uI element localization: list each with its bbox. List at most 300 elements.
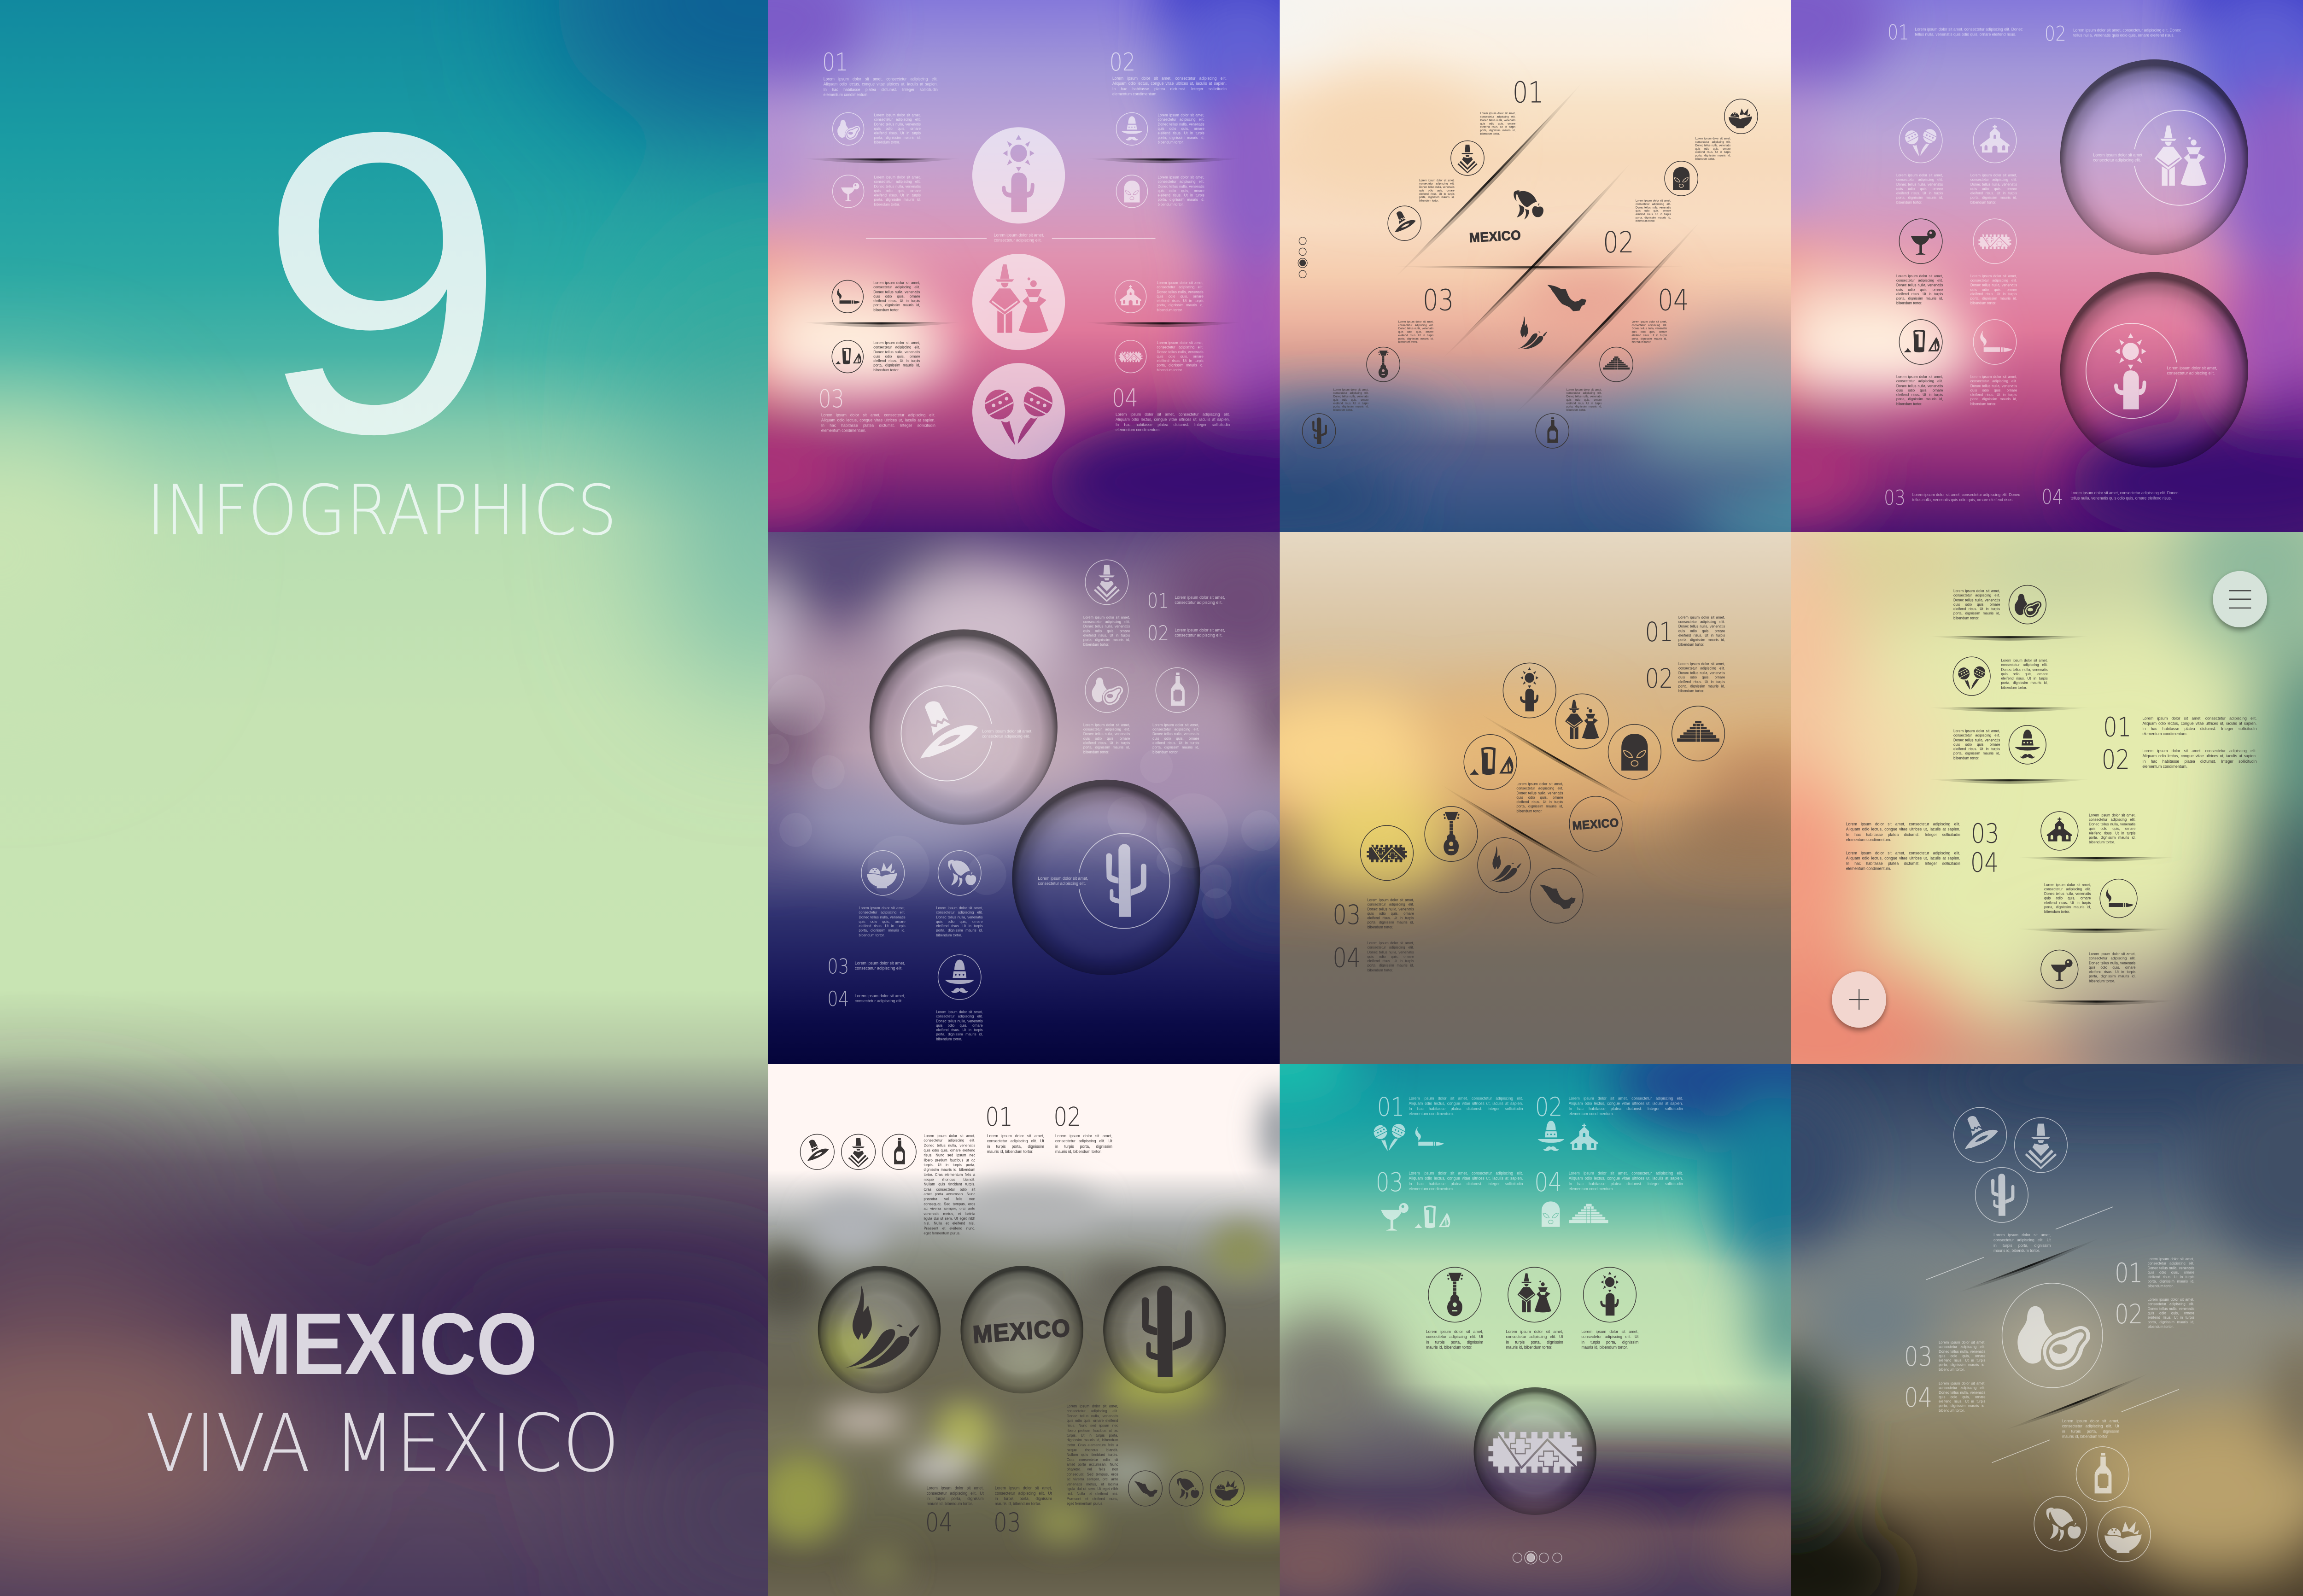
caption: cigar: consectetur adipiscing elit. xyxy=(1970,380,2017,384)
text block 01: Lorem ipsum dolor sit amet, consectetur adipiscing elit. xyxy=(824,76,938,82)
text 01: tellus nulla, venenatis quis odio quis, ornare eleifend risus. xyxy=(1915,32,2016,37)
text 01: Aliquam odio lectus, congue vitae ultrices ut, iaculis at sapien. xyxy=(2142,721,2256,726)
text block 02: Lorem ipsum dolor sit amet, consectetur adipiscing elit. xyxy=(1112,76,1227,81)
caption: tequila shot: quis odio quis, ornare xyxy=(873,355,920,359)
caption: church: quis odio quis, ornare xyxy=(2089,827,2135,831)
text 04: bibendum tortor. xyxy=(1367,968,1393,972)
caption: church: consectetur adipiscing elit. xyxy=(1157,286,1204,290)
caption 4: bibendum tortor. xyxy=(1636,219,1655,222)
text 03: in turpis porta, dignissim xyxy=(995,1496,1052,1501)
caption: taco xyxy=(936,906,983,938)
caption 2: quis odio quis, ornare xyxy=(1419,189,1455,192)
caption: avocado: Donec tellus nulla, venenatis xyxy=(874,123,921,126)
caption: maracas: bibendum tortor. xyxy=(1896,200,1922,205)
title: big number 9: 9 xyxy=(257,43,507,522)
text 01: Lorem ipsum dolor sit amet, xyxy=(2148,1257,2194,1261)
text 03: Lorem ipsum dolor sit amet, xyxy=(995,1486,1052,1491)
text 02: Donec tellus nulla, venenatis xyxy=(2148,1307,2194,1311)
text 01: Lorem ipsum dolor sit amet, consectetur adipiscing elit. xyxy=(2142,716,2256,721)
caption: cigar: consectetur adipiscing elit. xyxy=(2044,887,2091,891)
caption 6: quis odio quis, ornare xyxy=(1333,398,1368,401)
caption: church: porta, dignissim mauris id, xyxy=(1970,196,2017,200)
caption: sombrero: Lorem ipsum dolor sit amet, xyxy=(936,1010,983,1014)
icon: maracas xyxy=(1953,657,1990,696)
text 02 xyxy=(1175,628,1225,638)
caption: tequila shot: quis odio quis, ornare xyxy=(1896,388,1943,392)
caption: tequila shot: bibendum tortor. xyxy=(1896,402,1922,406)
button: menu xyxy=(2213,571,2267,627)
text 01: bibendum tortor. xyxy=(2148,1284,2174,1288)
caption upper: consectetur adipiscing elit. Ut xyxy=(1993,1238,2051,1243)
icon: woven pattern xyxy=(1115,340,1146,373)
caption: cigar xyxy=(873,281,920,312)
long text column, bottom: consectetur adipiscing elit. xyxy=(1067,1409,1118,1413)
panel: infographic 5, sunset with icon circles xyxy=(1280,532,1792,1064)
caption: margarita: Lorem ipsum dolor sit amet, xyxy=(874,175,921,180)
caption: margarita: Donec tellus nulla, venenatis xyxy=(874,184,921,188)
caption: cigar: Donec tellus nulla, venenatis xyxy=(1970,384,2017,388)
long text column, bottom: Praesent et eleifend nunc, xyxy=(1067,1497,1118,1501)
caption: cigar: eleifend risus. Ut in turpis xyxy=(2044,901,2091,905)
caption: margarita: consectetur adipiscing elit. xyxy=(2089,957,2135,961)
text 02: mauris id, bibendum tortor. xyxy=(1055,1149,1102,1154)
caption: cigar: Lorem ipsum dolor sit amet, xyxy=(2044,883,2091,887)
number 01: 01 xyxy=(1888,21,1909,44)
text 01: porta, dignissim mauris id, xyxy=(2148,1280,2194,1284)
text 03: porta, dignissim mauris id, xyxy=(1939,1363,1985,1367)
icon: couple in open ring xyxy=(2134,110,2225,205)
text block 02: Aliquam odio lectus, congue vitae ultrices ut, iaculis at sapien. xyxy=(1112,81,1227,86)
center text xyxy=(1516,782,1563,813)
caption: church xyxy=(1157,281,1204,312)
icon: avocado large xyxy=(2002,1283,2103,1388)
caption 3 xyxy=(1695,137,1730,160)
caption: church xyxy=(2089,813,2135,845)
text 02: Lorem ipsum dolor sit amet, xyxy=(1175,628,1225,632)
number 01: 01 xyxy=(1377,1092,1404,1122)
caption: church: consectetur adipiscing elit. xyxy=(1970,178,2017,182)
caption 8: consectetur adipiscing elit. xyxy=(1567,391,1602,395)
caption: tequila shot xyxy=(1896,375,1943,407)
long text column, bottom: quis odio quis, ornare eleifend xyxy=(1067,1419,1118,1423)
caption: cigar: eleifend risus. Ut in turpis xyxy=(1970,393,2017,397)
caption 5: quis odio quis, ornare xyxy=(1398,330,1433,333)
caption: cactus and sun: in turpis porta, dignissim xyxy=(1581,1340,1638,1345)
text 01 xyxy=(1915,27,2022,37)
icon: cigar xyxy=(1973,320,2017,364)
text block 01: Aliquam odio lectus, congue vitae ultrices ut, iaculis at sapien. xyxy=(824,82,938,87)
text block 04: Lorem ipsum dolor sit amet, consectetur adipiscing elit. xyxy=(1116,412,1230,417)
text 04: porta, dignissim mauris id, xyxy=(1367,964,1414,968)
long text column, top: consequat. Sed tempus, eros xyxy=(924,1202,975,1206)
caption: wrestler mask: Donec tellus nulla, venenatis xyxy=(1157,184,1204,188)
caption: maracas xyxy=(1896,173,1943,205)
icon: cigar xyxy=(1415,1127,1444,1146)
text 03: mauris id, bibendum tortor. xyxy=(995,1502,1041,1506)
icon: pyramid xyxy=(1569,1204,1608,1223)
caption: tequila shot: bibendum tortor. xyxy=(873,368,900,372)
caption: sombrero: quis odio quis, ornare xyxy=(1157,127,1204,131)
caption: margarita: quis odio quis, ornare xyxy=(1896,288,1943,292)
button: add xyxy=(1832,971,1886,1028)
text 02 xyxy=(2148,1298,2194,1329)
caption: avocado xyxy=(874,113,921,145)
caption 8: bibendum tortor. xyxy=(1567,408,1586,412)
number 03: 03 xyxy=(1884,486,1906,510)
text 03: consectetur adipiscing elit. xyxy=(1367,903,1414,906)
text 03: In hac habitasse platea dictumst. Integer sollicitudin xyxy=(1409,1181,1523,1186)
text 01 xyxy=(987,1134,1044,1154)
cover titles xyxy=(0,0,768,1596)
caption 5: porta, dignissim mauris id, xyxy=(1398,337,1433,340)
caption: woven pattern: porta, dignissim mauris id, xyxy=(1970,297,2017,301)
caption: avocado xyxy=(1953,589,2000,620)
caption: woven pattern: eleifend risus. Ut in turpis xyxy=(1970,292,2017,296)
text 01: Donec tellus nulla, venenatis xyxy=(1678,625,1725,629)
text 02: porta, dignissim mauris id, xyxy=(2148,1320,2194,1324)
caption 4 xyxy=(1636,199,1671,222)
long text column, top: neque rhoncus blandit. xyxy=(924,1178,975,1182)
text 01: Lorem ipsum dolor sit amet, consectetur adipiscing elit. Donec xyxy=(1915,27,2022,32)
caption: bottle: bibendum tortor. xyxy=(1152,750,1178,754)
caption: cactus and sun xyxy=(1581,1329,1638,1350)
caption: cigar xyxy=(1970,375,2017,407)
caption: sombrero: consectetur adipiscing elit. xyxy=(1157,118,1204,122)
caption: woven pattern: bibendum tortor. xyxy=(1970,301,1996,305)
background xyxy=(1280,0,1792,532)
caption: maracas: Donec tellus nulla, venenatis xyxy=(2001,667,2048,672)
number 02: 02 xyxy=(2045,22,2066,46)
lens: cactus xyxy=(1012,780,1200,975)
caption: nacho bowl: Donec tellus nulla, venenatis xyxy=(859,915,906,919)
caption: maracas: Donec tellus nulla, venenatis xyxy=(1896,182,1943,187)
text 03: consectetur adipiscing elit. xyxy=(1939,1345,1985,1349)
caption 3: Lorem ipsum dolor sit amet, xyxy=(1695,137,1730,140)
caption 6 xyxy=(1333,388,1368,412)
long text column, top: Praesent et eleifend nunc, xyxy=(924,1226,975,1230)
number 04: 04 xyxy=(1333,943,1361,973)
text 04: In hac habitasse platea dictumst. Integer sollicitudin xyxy=(1569,1181,1683,1186)
icon: MEXICO wordmark in ring: MEXICO xyxy=(1572,816,1619,833)
number 03: 03 xyxy=(1333,900,1361,930)
text 02: quis odio quis, ornare xyxy=(1678,676,1725,679)
text 03 xyxy=(1939,1340,1985,1372)
caption: sombrero xyxy=(1157,113,1204,145)
icon: guitar xyxy=(1428,1267,1481,1322)
caption: couple xyxy=(1506,1329,1563,1350)
lens: cactus xyxy=(1103,1266,1226,1393)
text 01: Aliquam odio lectus, congue vitae ultrices ut, iaculis at sapien. xyxy=(1409,1101,1523,1106)
caption: avocado: quis odio quis, ornare xyxy=(1953,602,2000,607)
icon: chili peppers xyxy=(1517,316,1547,349)
long text column, bottom: libero pretium faucibus ut ac xyxy=(1067,1429,1118,1432)
text 01: in turpis porta, dignissim xyxy=(987,1144,1044,1149)
caption: sombrero: porta, dignissim mauris id, xyxy=(1157,136,1204,140)
caption: maracas: Lorem ipsum dolor sit amet, xyxy=(2001,659,2048,663)
caption 8: porta, dignissim mauris id, xyxy=(1567,405,1602,408)
icon: sombrero xyxy=(1116,113,1148,145)
text 01: consectetur adipiscing elit. Ut xyxy=(987,1139,1044,1144)
text 03 xyxy=(995,1486,1052,1507)
caption: tequila shot: consectetur adipiscing elit. xyxy=(1896,380,1943,384)
panel: infographic 7, blurred landscape with three lenses xyxy=(768,1064,1280,1596)
text 03 xyxy=(855,961,905,971)
long text column, bottom: nisl. Nulla et eleifend nisi. xyxy=(1067,1492,1118,1496)
caption: poncho: bibendum tortor. xyxy=(1083,643,1109,647)
caption: tequila shot: Donec tellus nulla, venenatis xyxy=(873,350,920,354)
panel: cover with title xyxy=(0,0,768,1596)
text block 01: In hac habitasse platea dictumst. Integer sollicitudin xyxy=(824,87,938,92)
graphics layer xyxy=(1791,532,2303,1064)
caption upper: in turpis porta, dignissim xyxy=(1993,1243,2051,1248)
icon: tilted hat xyxy=(800,1134,834,1169)
long text column, top: Nullam quis tincidunt turpis. xyxy=(924,1182,975,1187)
pagination dots xyxy=(1298,237,1307,278)
central circles with cut-out icons: cactus, couple, maracas xyxy=(972,127,1065,459)
caption: avocado: Lorem ipsum dolor sit amet, xyxy=(1083,723,1130,727)
text 04: elementum condimentum. xyxy=(1846,866,1891,871)
center text: quis odio quis, ornare xyxy=(1516,795,1563,800)
icon: margarita xyxy=(1899,219,1942,263)
icon: taco xyxy=(938,851,981,895)
icon: wrestler mask xyxy=(1116,175,1148,208)
text 01 xyxy=(2148,1257,2194,1289)
number 02: 02 xyxy=(1147,621,1169,645)
caption: margarita: consectetur adipiscing elit. xyxy=(874,180,921,184)
caption: avocado: consectetur adipiscing elit. xyxy=(1953,594,2000,597)
icon: map of Mexico xyxy=(1530,868,1583,923)
text 02: consectetur adipiscing elit. xyxy=(1175,633,1222,637)
icon: tequila shot xyxy=(1899,320,1942,364)
text 04: tellus nulla, venenatis quis odio quis, ornare eleifend risus. xyxy=(2070,496,2172,501)
text block 02: elementum condimentum. xyxy=(1112,92,1157,96)
text 03: consectetur adipiscing elit. xyxy=(855,966,903,971)
caption 7: consectetur adipiscing elit. xyxy=(1631,323,1667,327)
text 04: Lorem ipsum dolor sit amet, xyxy=(927,1486,984,1491)
caption: margarita: Lorem ipsum dolor sit amet, xyxy=(1896,274,1943,278)
caption: woven pattern: quis odio quis, ornare xyxy=(1970,288,2017,292)
text 03: Aliquam odio lectus, congue vitae ultrices ut, iaculis at sapien. xyxy=(1409,1176,1523,1181)
center caption: consectetur adipiscing elit. xyxy=(994,238,1042,243)
text 03: consectetur adipiscing elit. Ut xyxy=(995,1491,1052,1496)
text 02: Lorem ipsum dolor sit amet, xyxy=(1678,662,1725,666)
text 04: quis odio quis, ornare xyxy=(1367,955,1414,959)
icon: avocado xyxy=(1085,668,1128,713)
caption: avocado: eleifend risus. Ut in turpis xyxy=(1083,741,1130,745)
text 01: eleifend risus. Ut in turpis xyxy=(1678,633,1725,637)
text 01: Lorem ipsum dolor sit amet, consectetur adipiscing elit. xyxy=(1409,1096,1523,1101)
caption: sombrero: consectetur adipiscing elit. xyxy=(1953,734,2000,738)
caption: tequila shot: porta, dignissim mauris id, xyxy=(1896,398,1943,402)
caption: maracas: porta, dignissim mauris id, xyxy=(2001,681,2048,685)
caption 8: Donec tellus nulla, venenatis xyxy=(1567,395,1602,398)
long text column, bottom: amet porta accumsan. Nunc xyxy=(1067,1463,1118,1467)
text 02: eleifend risus. Ut in turpis xyxy=(2148,1316,2194,1320)
caption 6: porta, dignissim mauris id, xyxy=(1333,405,1368,408)
caption: cactus and sun: consectetur adipiscing elit. Ut xyxy=(1581,1334,1638,1339)
icon: poncho xyxy=(2015,1117,2067,1173)
long text column, top: quis odio quis, ornare eleifend xyxy=(924,1148,975,1152)
caption: margarita: consectetur adipiscing elit. xyxy=(1896,279,1943,283)
caption: maracas: Lorem ipsum dolor sit amet, xyxy=(1896,173,1943,177)
text 03: tellus nulla, venenatis quis odio quis, ornare eleifend risus. xyxy=(1912,497,2014,502)
caption: cigar: quis odio quis, ornare xyxy=(873,294,920,298)
number 03: 03 xyxy=(1376,1167,1403,1197)
icon: hat in open ring xyxy=(901,686,992,781)
center text: bibendum tortor. xyxy=(1516,809,1543,813)
caption: cigar: bibendum tortor. xyxy=(873,308,900,312)
lens: chili peppers xyxy=(818,1266,941,1393)
caption: sombrero xyxy=(936,1010,983,1041)
caption: margarita xyxy=(2089,952,2135,983)
caption 1: Lorem ipsum dolor sit amet, xyxy=(1480,111,1515,115)
text 04: Lorem ipsum dolor sit amet, xyxy=(855,994,905,998)
caption: margarita: porta, dignissim mauris id, xyxy=(874,198,921,202)
text 04: Donec tellus nulla, venenatis xyxy=(1939,1391,1985,1395)
caption: nacho bowl: consectetur adipiscing elit. xyxy=(859,911,906,915)
graphics layer xyxy=(768,532,1280,1064)
caption: avocado: porta, dignissim mauris id, xyxy=(1953,612,2000,616)
text 01: Lorem ipsum dolor sit amet, xyxy=(1678,615,1725,620)
text 03 xyxy=(1409,1171,1523,1192)
text 03: Lorem ipsum dolor sit amet, consectetur adipiscing elit. Donec xyxy=(1912,492,2020,497)
text 03: Lorem ipsum dolor sit amet, xyxy=(1939,1340,1985,1345)
text 04: Lorem ipsum dolor sit amet, xyxy=(1367,941,1414,945)
lens: couple xyxy=(2060,59,2248,255)
caption 5 xyxy=(1398,320,1433,344)
text 02: tellus nulla, venenatis quis odio quis, ornare eleifend risus. xyxy=(2073,33,2174,38)
caption: woven pattern: porta, dignissim mauris id, xyxy=(1157,363,1204,368)
long text column, top: Donec tellus nulla, venenatis xyxy=(924,1144,975,1148)
caption: sombrero: eleifend risus. Ut in turpis xyxy=(936,1028,983,1032)
lens caption: cactus: consectetur adipiscing elit. xyxy=(1038,881,1086,886)
lens caption: hat xyxy=(982,729,1033,739)
caption: wrestler mask: eleifend risus. Ut in turpis xyxy=(1157,193,1204,198)
caption lower: consectetur adipiscing elit. Ut xyxy=(2062,1424,2119,1428)
caption: wrestler mask: porta, dignissim mauris id, xyxy=(1157,198,1204,202)
icon: church xyxy=(1973,118,2017,163)
caption: tequila shot: consectetur adipiscing elit. xyxy=(873,345,920,350)
caption: sombrero: Donec tellus nulla, venenatis xyxy=(1953,738,2000,742)
text 03: quis odio quis, ornare xyxy=(1367,912,1414,916)
caption 7 xyxy=(1631,320,1667,344)
cover background gradient xyxy=(0,0,768,1596)
icon: chili peppers xyxy=(1478,838,1531,893)
caption: avocado: bibendum tortor. xyxy=(1953,616,1979,620)
caption: sombrero: consectetur adipiscing elit. xyxy=(936,1015,983,1019)
caption: margarita: eleifend risus. Ut in turpis xyxy=(2089,970,2135,974)
number 01: 01 xyxy=(2115,1258,2143,1289)
caption: margarita: eleifend risus. Ut in turpis xyxy=(1896,292,1943,296)
background xyxy=(1280,1064,1792,1596)
caption: poncho: eleifend risus. Ut in turpis xyxy=(1083,633,1130,637)
text 04: bibendum tortor. xyxy=(1939,1409,1964,1413)
long text column, bottom xyxy=(1067,1404,1118,1506)
caption: nacho bowl xyxy=(859,906,906,938)
caption: church: bibendum tortor. xyxy=(1970,200,1996,205)
long text column, bottom: neque rhoncus blandit. xyxy=(1067,1448,1118,1452)
long text column, top: libero pretium faucibus ut ac xyxy=(924,1158,975,1162)
caption: margarita: bibendum tortor. xyxy=(1896,301,1922,305)
number 02: 02 xyxy=(1110,48,1135,76)
caption: nacho bowl: Lorem ipsum dolor sit amet, xyxy=(859,906,906,910)
caption 6: bibendum tortor. xyxy=(1333,408,1353,412)
caption: margarita: Donec tellus nulla, venenatis xyxy=(1896,283,1943,287)
text 03: Lorem ipsum dolor sit amet, xyxy=(855,961,905,965)
caption 1: consectetur adipiscing elit. xyxy=(1480,115,1515,118)
caption: taco: Donec tellus nulla, venenatis xyxy=(936,915,983,919)
caption: maracas: bibendum tortor. xyxy=(2001,686,2027,690)
lens: hat xyxy=(870,629,1058,825)
text 02 xyxy=(2073,28,2181,38)
caption: church xyxy=(1970,173,2017,205)
text 04: Aliquam odio lectus, congue vitae ultrices ut, iaculis at sapien. xyxy=(1569,1176,1683,1181)
background xyxy=(1791,1064,2303,1596)
text 03: quis odio quis, ornare xyxy=(1939,1354,1985,1358)
center text: consectetur adipiscing elit. xyxy=(1516,787,1563,791)
caption: church: eleifend risus. Ut in turpis xyxy=(1970,192,2017,195)
caption: church: consectetur adipiscing elit. xyxy=(2089,818,2135,822)
caption: tequila shot: eleifend risus. Ut in turpis xyxy=(873,359,920,363)
caption: taco: eleifend risus. Ut in turpis xyxy=(936,924,983,928)
caption lower: Lorem ipsum dolor sit amet, xyxy=(2062,1419,2119,1423)
icon: guitar xyxy=(1367,347,1400,382)
long text column, top: dignissim mauris id, bibendum xyxy=(924,1168,975,1172)
caption: cigar: bibendum tortor. xyxy=(2044,910,2070,914)
panel: infographic 4, bokeh with lenses xyxy=(768,532,1280,1064)
number 04: 04 xyxy=(827,988,849,1011)
caption: avocado: porta, dignissim mauris id, xyxy=(874,136,921,140)
lens caption: couple xyxy=(2093,152,2144,163)
icon: cigar xyxy=(832,280,863,313)
caption: avocado: eleifend risus. Ut in turpis xyxy=(1953,607,2000,611)
icon: guitar xyxy=(1425,807,1478,861)
text 02: consectetur adipiscing elit. Ut xyxy=(1055,1139,1112,1144)
caption: bottle: Donec tellus nulla, venenatis xyxy=(1152,732,1199,736)
caption: margarita: Donec tellus nulla, venenatis xyxy=(2089,961,2135,965)
text 01: consectetur adipiscing elit. xyxy=(2148,1262,2194,1266)
caption: woven pattern xyxy=(1970,274,2017,306)
caption: church: Lorem ipsum dolor sit amet, xyxy=(1970,173,2017,177)
caption: margarita: bibendum tortor. xyxy=(2089,979,2115,983)
icon: map of Mexico xyxy=(1128,1471,1162,1506)
icon: couple xyxy=(1555,694,1608,749)
text 02: consectetur adipiscing elit. xyxy=(2148,1302,2194,1306)
caption: poncho: consectetur adipiscing elit. xyxy=(1083,620,1130,624)
center text: Lorem ipsum dolor sit amet, xyxy=(1516,782,1563,786)
text 03: bibendum tortor. xyxy=(1367,925,1393,929)
long text column, bottom: risus. Nunc sed ipsum nec xyxy=(1067,1424,1118,1428)
text 02: bibendum tortor. xyxy=(2148,1325,2174,1329)
text 01 xyxy=(1175,595,1225,606)
text 03: In hac habitasse platea dictumst. Integer sollicitudin xyxy=(1846,832,1960,837)
lens: MEXICO wordmark xyxy=(960,1266,1083,1393)
caption: sombrero: Donec tellus nulla, venenatis xyxy=(1157,123,1204,126)
number 02: 02 xyxy=(1053,1102,1081,1132)
caption 5: consectetur adipiscing elit. xyxy=(1398,323,1433,327)
text 01: quis odio quis, ornare xyxy=(1678,629,1725,633)
caption 1: eleifend risus. Ut in turpis xyxy=(1480,125,1515,129)
number 03: 03 xyxy=(1904,1342,1932,1372)
caption: maracas: quis odio quis, ornare xyxy=(1896,187,1943,191)
text 01 xyxy=(1678,615,1725,647)
text 01: elementum condimentum. xyxy=(1409,1111,1454,1117)
caption lower xyxy=(2062,1419,2119,1439)
text block 04: Aliquam odio lectus, congue vitae ultrices ut, iaculis at sapien. xyxy=(1116,417,1230,422)
caption: tequila shot: Donec tellus nulla, venenatis xyxy=(1896,384,1943,388)
caption: guitar: mauris id, bibendum tortor. xyxy=(1426,1345,1473,1350)
caption 1: porta, dignissim mauris id, xyxy=(1480,129,1515,132)
